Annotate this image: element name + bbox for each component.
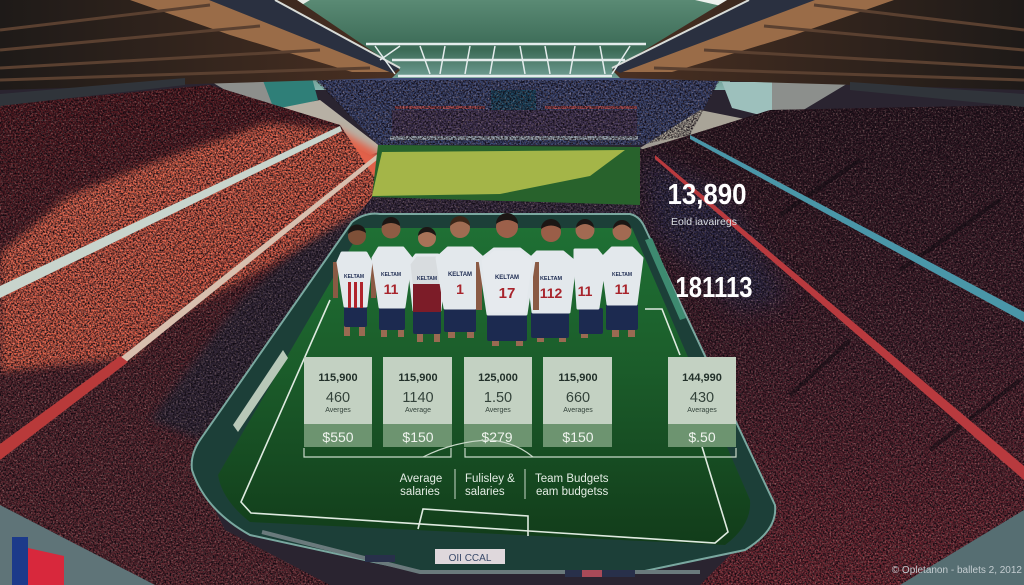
gantry right	[850, 82, 1024, 107]
pitch lines	[241, 300, 728, 543]
card 4: 660	[566, 390, 590, 406]
card 5: $.50	[688, 429, 716, 445]
card 4: 115,900	[558, 372, 598, 384]
card 5: 430	[690, 390, 714, 406]
pitch-side advertising board	[435, 549, 505, 564]
left stands crowd	[0, 85, 380, 585]
card 5: 144,990	[682, 372, 722, 384]
player 8	[602, 220, 642, 337]
card 1: 115,900	[318, 372, 358, 384]
glimpses behind stands	[205, 78, 850, 155]
stat caption: Eold iavairegs	[671, 216, 737, 228]
big screen	[491, 90, 536, 110]
stat: 13,890: 13,890	[668, 179, 746, 211]
player 4: 1	[456, 281, 464, 297]
player 2: KELTAM	[381, 272, 401, 278]
card 3: Averges	[485, 407, 511, 414]
far pitch	[372, 145, 640, 205]
legend: average salaries: salaries	[400, 486, 440, 498]
card 2: Average	[405, 407, 431, 414]
card 2: 115,900	[398, 372, 438, 384]
board text: OII CCAL	[449, 553, 492, 564]
side advertising rail right	[645, 238, 686, 320]
legend: average salaries: Average	[400, 473, 442, 485]
sunlit crowd on left	[0, 123, 383, 372]
player 2: 11	[384, 281, 399, 297]
card 3: $279	[481, 429, 513, 445]
player 6: 112	[540, 285, 563, 301]
player row	[333, 213, 642, 346]
roof right	[612, 0, 1024, 90]
white truss	[366, 44, 646, 76]
player 8: KELTAM	[612, 272, 632, 278]
card 4: $150	[562, 429, 594, 445]
lower concourse	[262, 532, 700, 572]
card 1: 460	[326, 390, 350, 406]
side advertising rail left	[233, 350, 288, 432]
player 6: KELTAM	[540, 276, 562, 282]
crowd between pitches	[352, 197, 640, 225]
card 1: $550	[322, 429, 354, 445]
card 2: $150	[402, 429, 434, 445]
back stand crowd	[315, 78, 720, 145]
blue shadow crowd, right	[640, 155, 790, 310]
player 4	[437, 216, 483, 338]
card 2	[383, 357, 452, 447]
player 4: KELTAM	[448, 272, 472, 278]
card 1: Averges	[325, 407, 351, 414]
copyright text: © Opletanon - ballets 2, 2012	[892, 565, 1022, 576]
player 5: 17	[499, 285, 515, 302]
player 5: KELTAM	[495, 275, 519, 281]
dark shadow near pitch, left	[150, 190, 380, 440]
legend: team budgets: Team Budgets	[535, 473, 609, 485]
legend: fulisley and salaries: Fulisley &	[465, 473, 515, 485]
gantry left	[0, 78, 185, 106]
card 5: Averages	[687, 407, 717, 414]
mountain backdrop	[290, 0, 730, 90]
player 2	[373, 217, 411, 337]
card 2: 1140	[402, 390, 434, 406]
player 1	[333, 224, 376, 336]
legend: team budgets: eam budgetss	[536, 486, 608, 498]
player 7	[575, 219, 605, 338]
card 5	[668, 357, 736, 447]
player 3	[409, 227, 445, 342]
player 6	[527, 219, 575, 342]
pitch surround	[192, 214, 775, 572]
player 3: KELTAM	[417, 276, 437, 282]
brackets and centre arc	[304, 440, 736, 457]
stand aisles	[780, 160, 1020, 450]
bottom-right wall	[900, 510, 1024, 585]
card 3	[464, 357, 532, 447]
bottom-left wall	[0, 505, 155, 585]
card 3: 1.50	[484, 390, 512, 406]
card 4: Averages	[563, 407, 593, 414]
stand barriers	[0, 126, 1024, 480]
ad boards	[365, 555, 635, 577]
card 3: 125,000	[478, 372, 518, 384]
legend: fulisley and salaries: salaries	[465, 486, 505, 498]
player 8: 11	[615, 281, 630, 297]
card 4	[543, 357, 612, 447]
roof left	[0, 0, 400, 90]
player 1: KELTAM	[344, 274, 364, 280]
card 1	[304, 357, 372, 447]
right stands crowd	[640, 105, 1024, 585]
stat: 181113: 181113	[676, 272, 752, 304]
flag	[12, 537, 64, 585]
main pitch	[218, 228, 750, 545]
player 5	[476, 213, 539, 346]
player 7: 11	[578, 283, 593, 299]
